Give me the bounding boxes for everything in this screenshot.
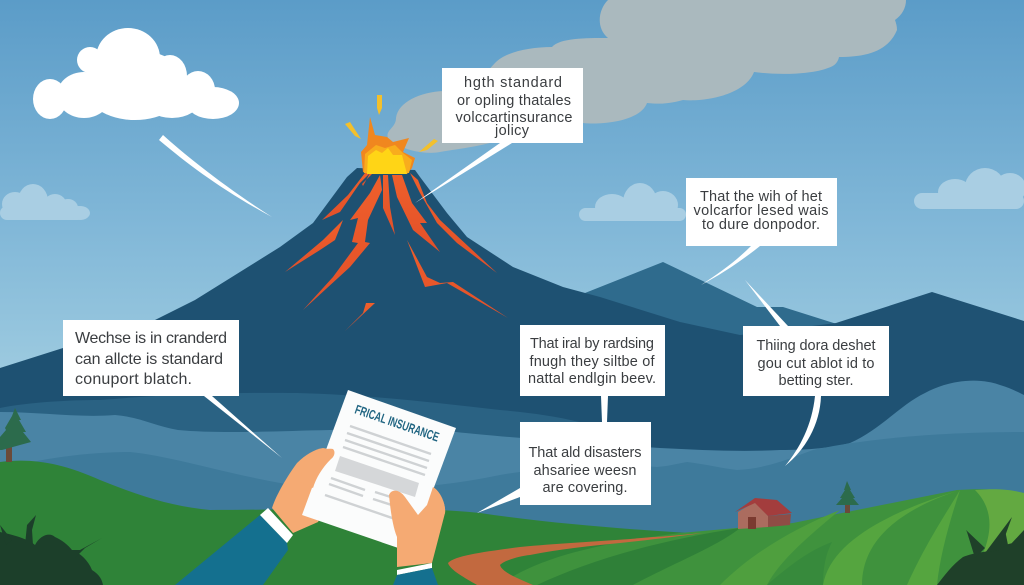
callout: top box: jolicy: [494, 123, 530, 139]
callout: top box: volccartinsurance: [456, 110, 572, 126]
callout: right box: betting ster.: [778, 373, 854, 389]
callout pointer: white cloud: [159, 135, 272, 217]
lower hills band: [0, 432, 1024, 560]
callout: centre box: nattal endlgin beev.: [528, 371, 656, 387]
lava flows: [285, 173, 508, 331]
callout: lower centre box: are covering.: [542, 480, 628, 496]
document grey block: [335, 456, 419, 497]
callout: right top box: [686, 178, 837, 246]
green hill right striped: [500, 489, 1024, 585]
callout: top box: hgth standard: [464, 75, 562, 91]
callout pointer: right box downward: [785, 396, 821, 466]
callout: lower centre box: [520, 422, 651, 505]
callout: right box: Thiing dora deshet: [756, 338, 876, 354]
crater fire: [361, 117, 415, 174]
callout pointer: right top box: [701, 246, 760, 285]
callout: centre box: That iral by rardsing: [530, 336, 654, 352]
hands holding insurance document: [175, 390, 456, 585]
callout: right top box: volcarfor lesed wais: [694, 203, 828, 219]
callout: left box: [63, 320, 239, 396]
callout pointer: lower centre box: [477, 488, 520, 513]
dirt road: [448, 533, 703, 585]
bush right: [937, 517, 1024, 585]
foreground ridge band: [0, 393, 640, 500]
left cuff: [260, 508, 293, 543]
volcanic smoke plume: [387, 0, 906, 153]
callout: lower centre box: That ald disasters: [528, 445, 642, 461]
volcano: [0, 168, 800, 470]
right sleeve: [393, 568, 438, 585]
callout pointer: right box upward: [745, 280, 788, 326]
pale cloud left: [0, 184, 90, 220]
document: [302, 390, 456, 552]
callout: right box: [743, 326, 889, 396]
document text lines: [325, 426, 431, 520]
right hand: [389, 487, 445, 567]
right fingers behind paper: [420, 487, 445, 530]
house: [735, 498, 792, 529]
right cuff: [397, 563, 432, 575]
eruption sparks: [345, 95, 438, 152]
pale cloud centre: [579, 183, 686, 221]
callout: right top box: That the wih of het: [700, 189, 822, 205]
callout pointer: top box to crater: [415, 143, 512, 203]
callout: lower centre box: ahsariee weesn: [534, 463, 636, 479]
connector between centre boxes: [601, 396, 608, 422]
pine tree right: [836, 481, 859, 513]
callout: top box: or opling thatales: [457, 93, 571, 109]
white cloud: [33, 28, 239, 120]
left hand: [272, 448, 345, 533]
document title: FRICAL INSURANCE: [353, 402, 441, 445]
bush left: [0, 515, 103, 585]
callout: right box: gou cut ablot id to: [758, 356, 874, 372]
callout: right top box: to dure donpodor.: [702, 217, 820, 233]
green hill left: [0, 461, 720, 585]
pale cloud right: [914, 168, 1024, 209]
callout: left box: conuport blatch.: [75, 371, 192, 388]
callout: centre box: fnugh they siltbe of: [530, 354, 655, 370]
callout: top box: [442, 68, 583, 143]
left sleeve: [175, 515, 288, 585]
right mountain: [740, 292, 1024, 470]
callout pointer: left box: [204, 396, 282, 458]
callout: left box: Wechse is in cranderd: [75, 330, 227, 347]
middle hills band: [0, 381, 1024, 560]
callout: centre box: [520, 325, 665, 396]
pine tree left: [0, 408, 31, 462]
sky background: [0, 0, 1024, 420]
far mountain: [585, 262, 840, 380]
left thumb: [300, 449, 334, 488]
callout: left box: can allcte is standard: [75, 351, 223, 368]
